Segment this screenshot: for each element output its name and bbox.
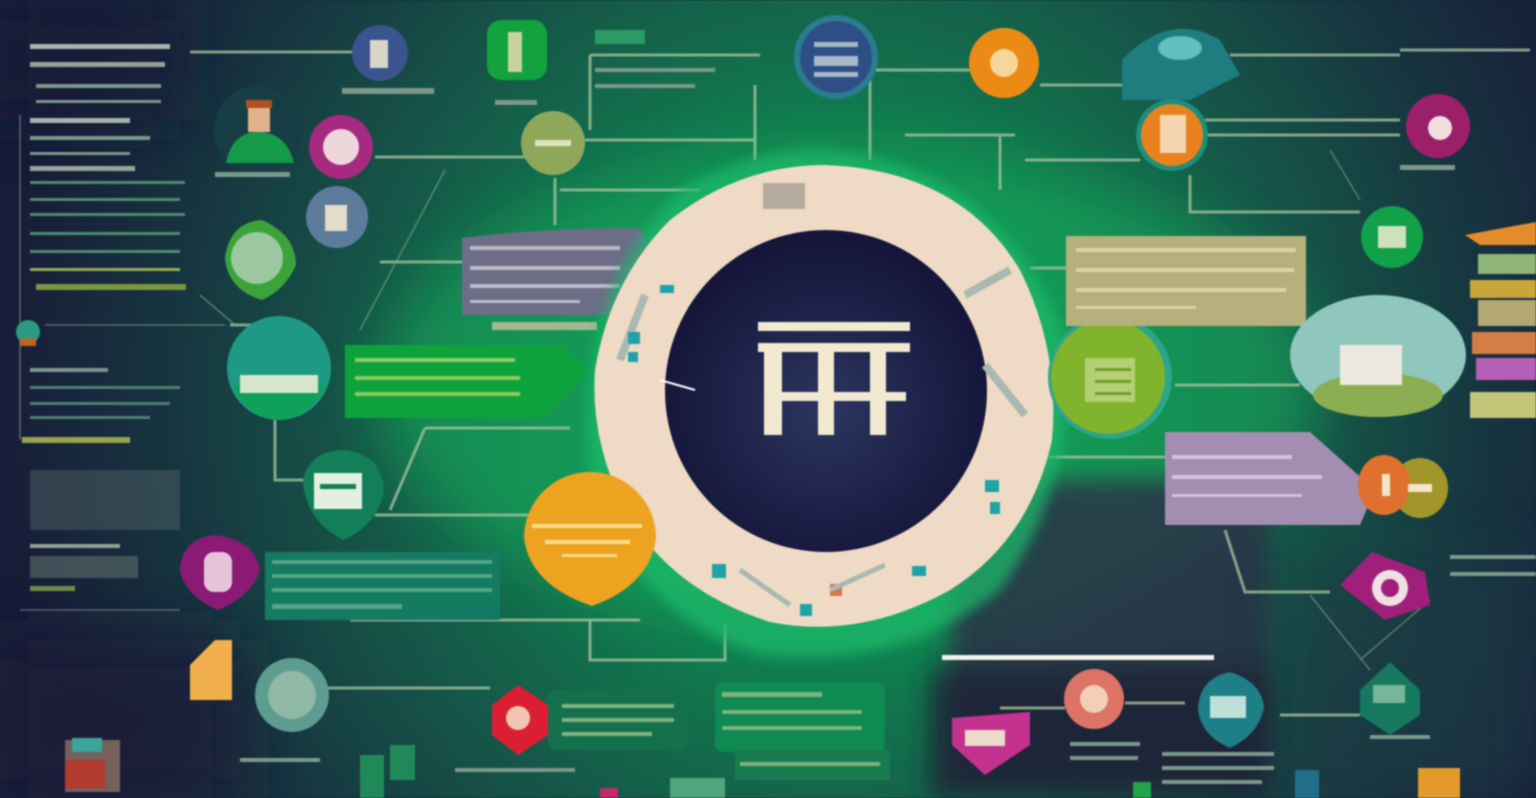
icon: small left node xyxy=(16,320,40,346)
icon: orange and olive pair xyxy=(1358,455,1448,518)
icon: bottom row xyxy=(65,640,1460,798)
icon: top row circles xyxy=(352,15,1470,268)
logo glyphs xyxy=(758,322,910,435)
icon: left cluster circles xyxy=(180,111,585,610)
white highlight line xyxy=(942,655,1214,660)
icon: lime circle xyxy=(1048,315,1172,439)
panel: green callout left xyxy=(345,345,590,418)
panel: purple callout xyxy=(462,228,652,330)
icon: landscape dome xyxy=(1290,295,1466,417)
central ring glow xyxy=(587,150,1067,657)
central dark hub with logo xyxy=(665,230,987,552)
panel: green text band lower left xyxy=(265,552,500,620)
panel: lower green cards xyxy=(548,682,890,780)
icon: person portrait xyxy=(214,86,302,174)
panel: lilac callout xyxy=(1165,432,1375,525)
icon: stacked color layers xyxy=(1465,222,1536,418)
icon: magenta hexagon xyxy=(1340,552,1430,620)
panel: left text column xyxy=(22,44,186,591)
icon: large orange pin xyxy=(524,472,656,606)
ring accent marks xyxy=(620,183,1025,616)
panel: tan callout xyxy=(1066,236,1306,326)
